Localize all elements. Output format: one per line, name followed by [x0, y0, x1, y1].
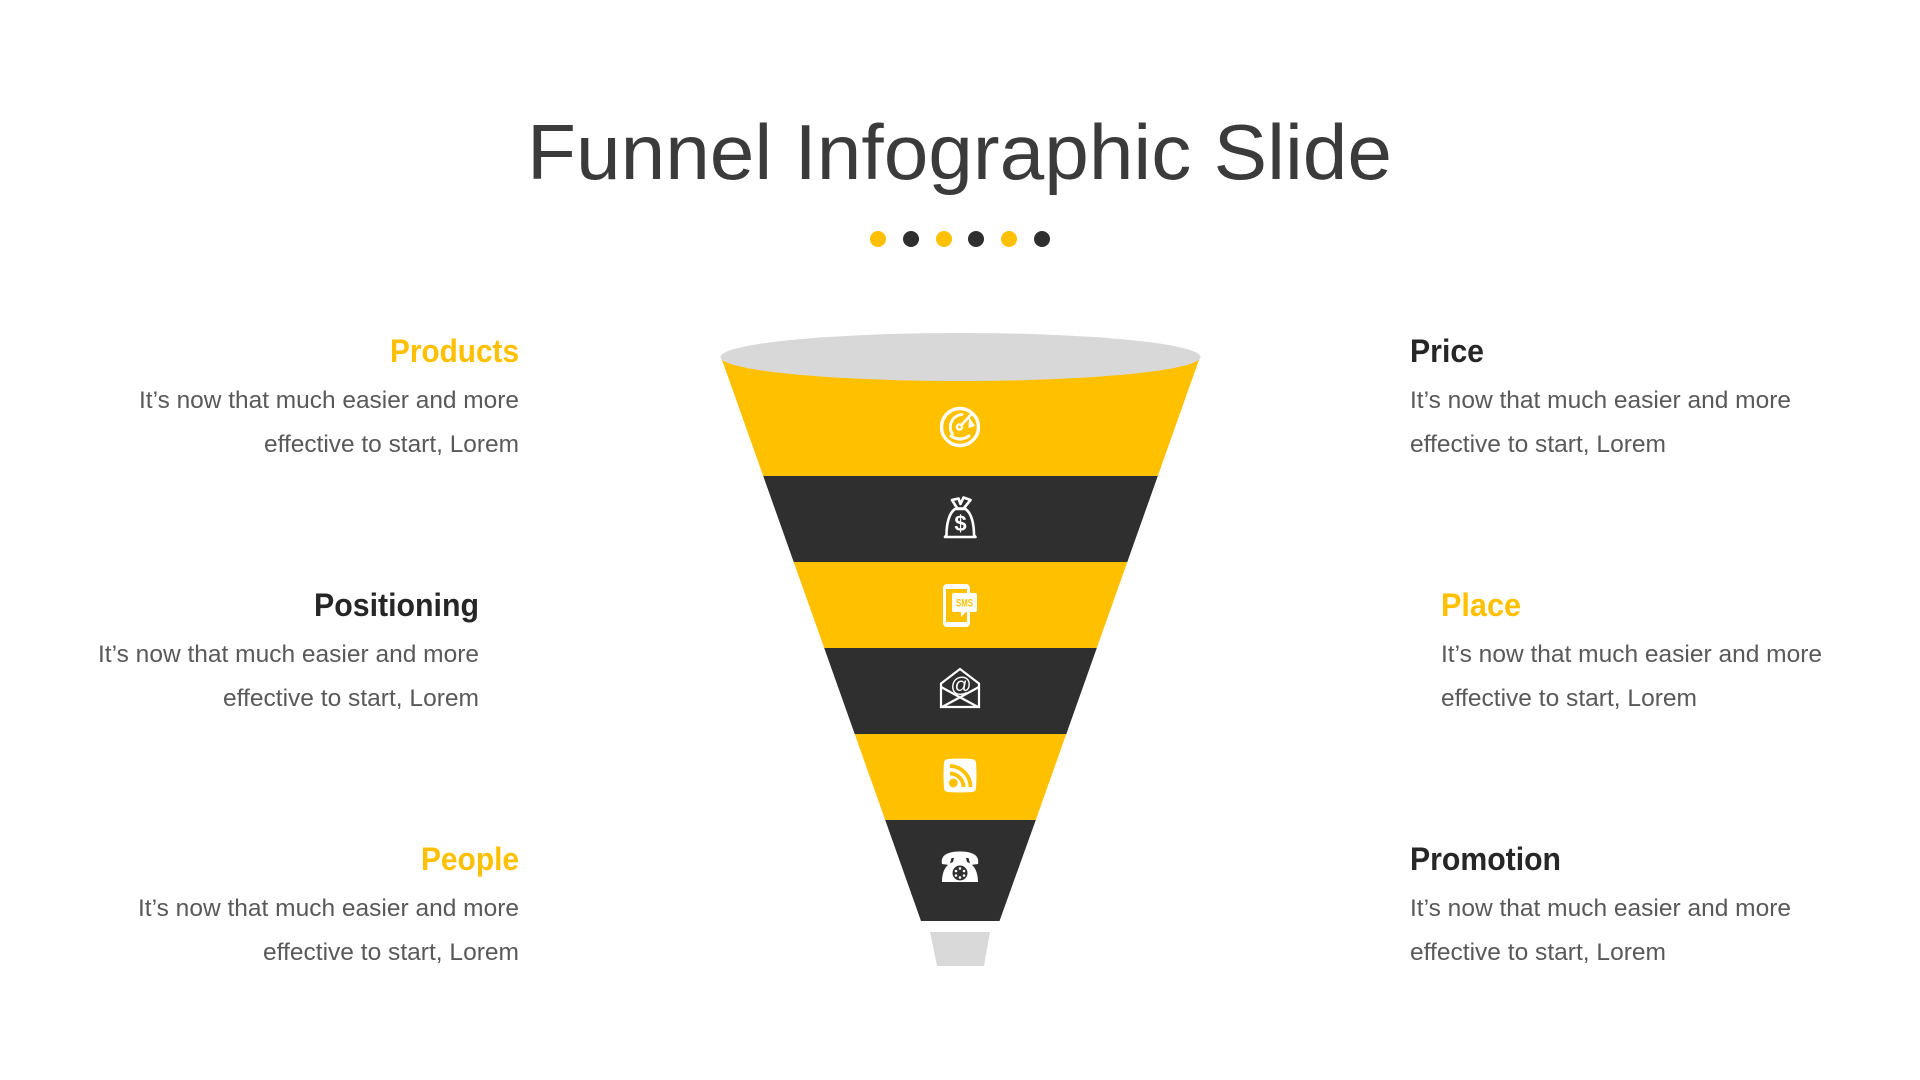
funnel band 6 [885, 820, 1036, 921]
text block: positioning: Positioning [314, 587, 479, 623]
text block: promotion: effective to start, Lorem [1410, 939, 1666, 966]
icon: email envelope: @ [950, 674, 972, 697]
text block: promotion [1410, 841, 1791, 966]
text block: place: It’s now that much easier and more [1441, 641, 1822, 668]
text block: people: effective to start, Lorem [263, 939, 519, 966]
icon: money bag: $ [954, 511, 967, 536]
icon: telephone [942, 852, 978, 882]
text block: price: effective to start, Lorem [1410, 431, 1666, 458]
text block: products: Products [390, 333, 519, 369]
text block: price: Price [1410, 333, 1484, 369]
text block: products [139, 333, 519, 458]
text block: promotion: Promotion [1410, 841, 1561, 877]
text block: place: Place [1441, 587, 1521, 623]
dot row divider [870, 231, 1050, 247]
funnel band 3 [794, 562, 1127, 648]
text block: positioning [98, 587, 479, 712]
text block: people [138, 841, 519, 966]
icon: sms phone: SMS [956, 598, 973, 610]
text block: people: People [421, 841, 519, 877]
title: Funnel Infographic Slide [527, 108, 1392, 196]
text block: positioning: It’s now that much easier and more [98, 641, 479, 668]
funnel [720, 333, 1200, 966]
funnel band 4 [824, 648, 1097, 734]
funnel spout [930, 932, 990, 966]
text block: positioning: effective to start, Lorem [223, 685, 479, 712]
icon: email envelope [941, 669, 979, 707]
text block: products: It’s now that much easier and more [139, 387, 519, 414]
text block: place [1441, 587, 1822, 712]
icon: sms phone [943, 584, 977, 627]
funnel rim [720, 333, 1200, 381]
text block: place: effective to start, Lorem [1441, 685, 1697, 712]
text block: price: It’s now that much easier and more [1410, 387, 1791, 414]
text block: promotion: It’s now that much easier and more [1410, 895, 1791, 922]
funnel band 5 [855, 734, 1066, 820]
icon: money bag [945, 498, 976, 537]
text block: people: It’s now that much easier and more [138, 895, 519, 922]
text block: products: effective to start, Lorem [264, 431, 519, 458]
icon: gauge [942, 408, 978, 446]
funnel band 1 [721, 357, 1200, 476]
text block: price [1410, 333, 1791, 458]
funnel band 2 [763, 476, 1158, 562]
icon: rss feed [944, 758, 976, 792]
